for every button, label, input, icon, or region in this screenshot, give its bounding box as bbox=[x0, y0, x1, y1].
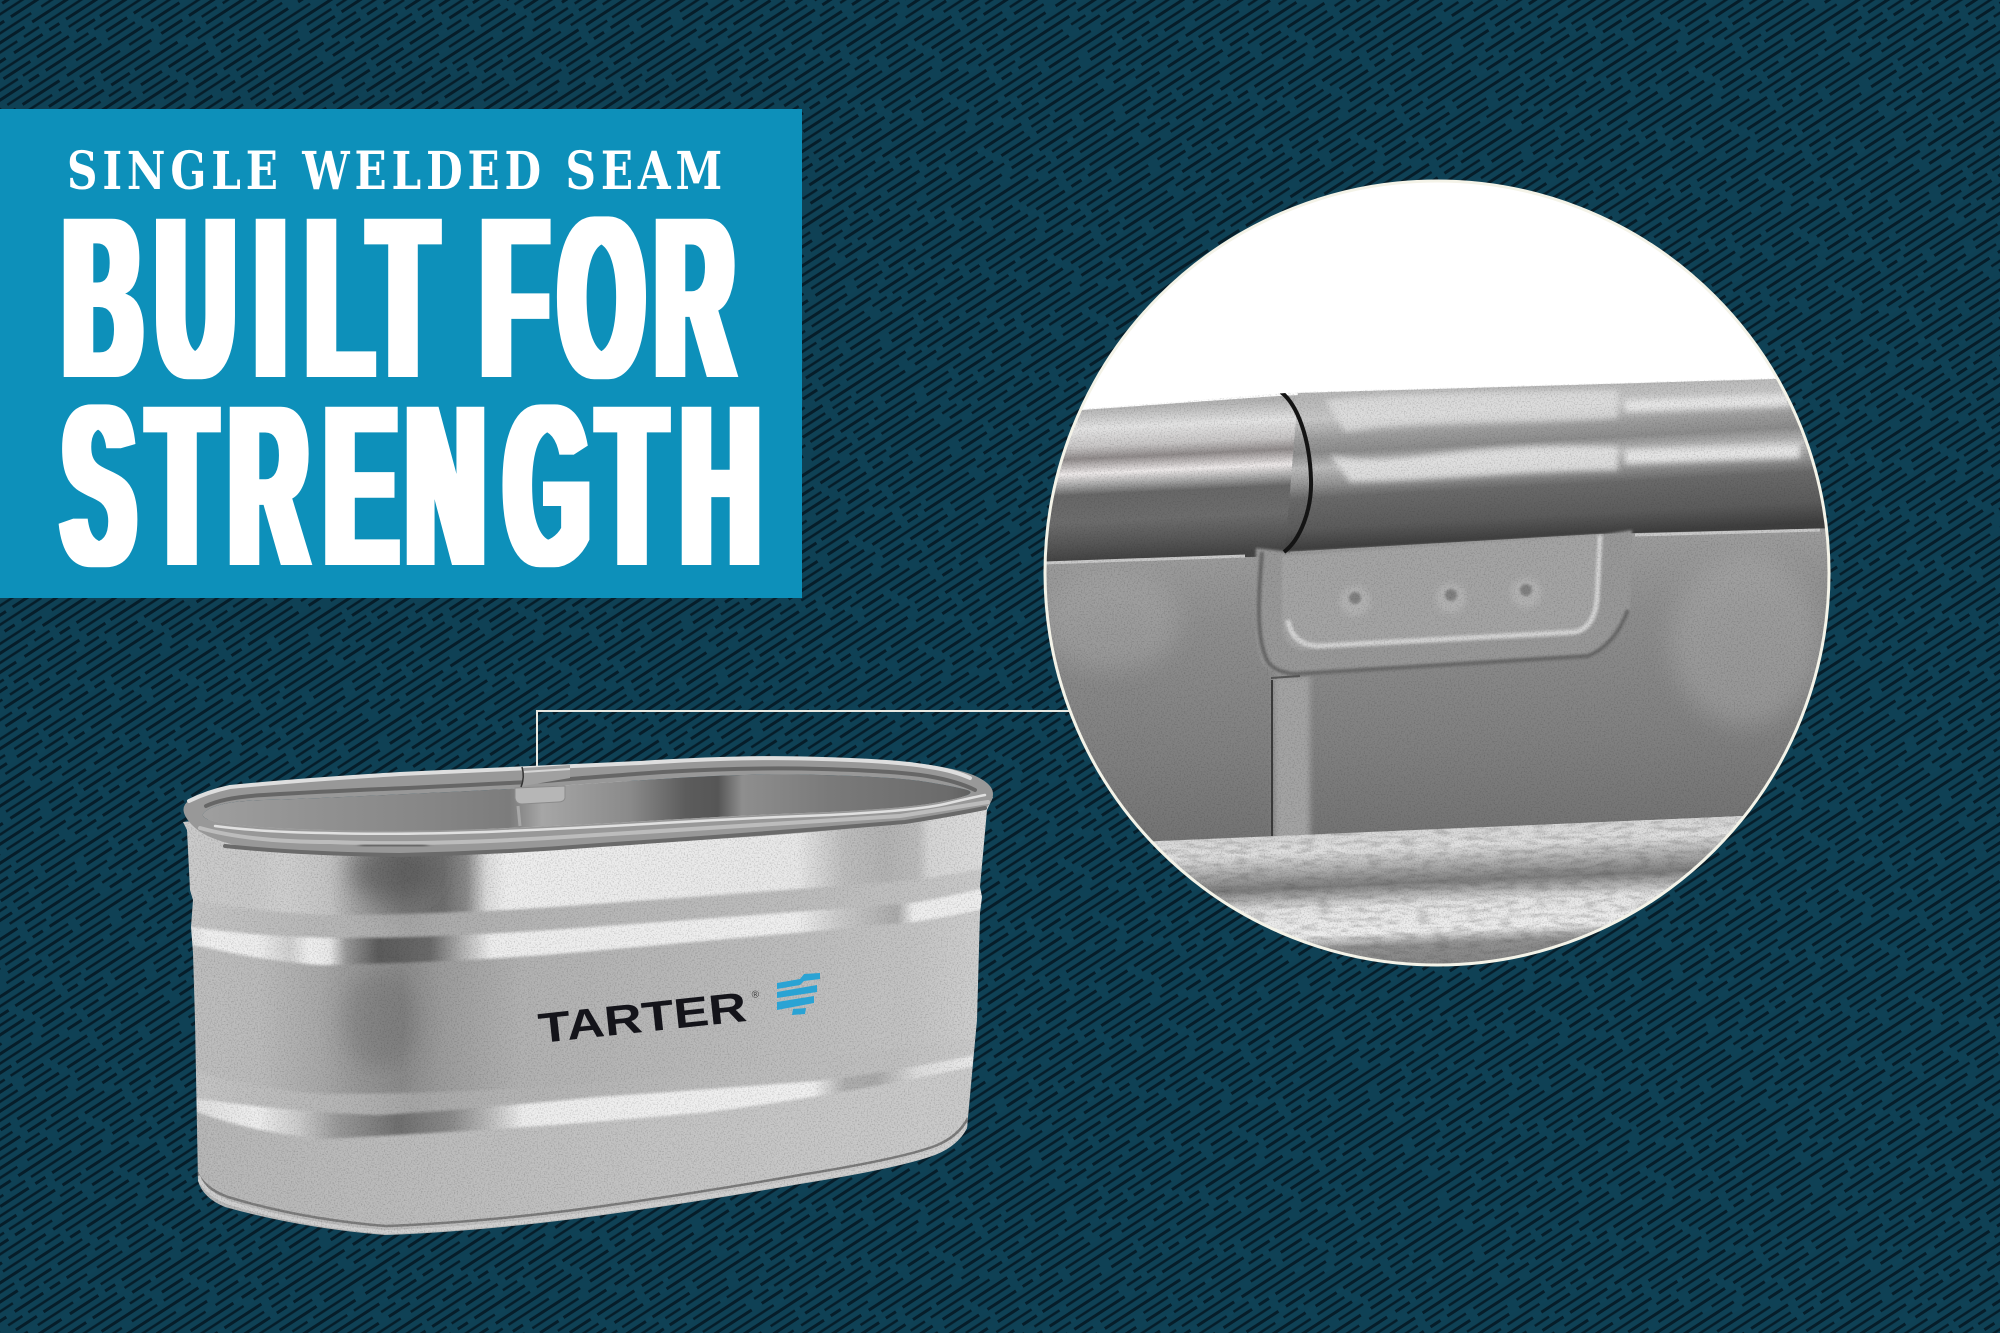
sleeve highlights bbox=[1325, 390, 1800, 482]
vertical weld seam bbox=[1271, 676, 1310, 840]
callout connector line bbox=[537, 711, 1070, 768]
headline: BUILT FOR bbox=[63, 170, 734, 427]
bottom rib bbox=[1154, 816, 1742, 964]
grain bbox=[184, 806, 988, 1235]
white area above the rim bbox=[1083, 370, 1774, 409]
title panel bbox=[0, 109, 802, 615]
tab plate with three dimples bbox=[1255, 530, 1632, 676]
rim highlights bbox=[189, 758, 988, 855]
lower rib highlight bbox=[196, 1054, 974, 1139]
eyebrow text: SINGLE WELDED SEAM bbox=[67, 141, 727, 202]
registered mark: ® bbox=[751, 989, 760, 1001]
dark seam joint arc bbox=[1281, 392, 1311, 552]
zoom circle: seam close-up bbox=[1030, 170, 1840, 1000]
TARTER logo bbox=[536, 973, 820, 1052]
rim tube left bbox=[1030, 395, 1300, 562]
logo wordmark: TARTER bbox=[536, 983, 749, 1052]
headline: STRENGTH bbox=[63, 358, 760, 615]
middle panel bbox=[192, 909, 980, 1096]
dimple bbox=[1512, 579, 1540, 607]
upper panel bbox=[183, 781, 993, 917]
wall top highlight bbox=[1045, 530, 1820, 563]
wall panel bbox=[1030, 524, 1840, 850]
soft dark reflections bbox=[342, 842, 434, 1070]
tank body bbox=[183, 781, 993, 1235]
rim tube right bbox=[1285, 377, 1840, 552]
bottom bead bbox=[196, 1118, 968, 1226]
bottom panel bbox=[196, 1066, 972, 1235]
upper rib highlight bbox=[191, 888, 982, 966]
rolled rim bbox=[183, 757, 993, 855]
dimple bbox=[1341, 587, 1369, 615]
galvanized stock tank bbox=[170, 750, 1000, 1250]
small seam tab on rim bbox=[515, 765, 570, 826]
upper rib flat bbox=[229, 868, 982, 939]
dimple bbox=[1437, 584, 1465, 612]
logo icon bbox=[777, 973, 820, 1015]
headline bbox=[63, 170, 760, 615]
tank opening interior bbox=[203, 774, 971, 831]
lower rib flat bbox=[282, 1092, 493, 1116]
